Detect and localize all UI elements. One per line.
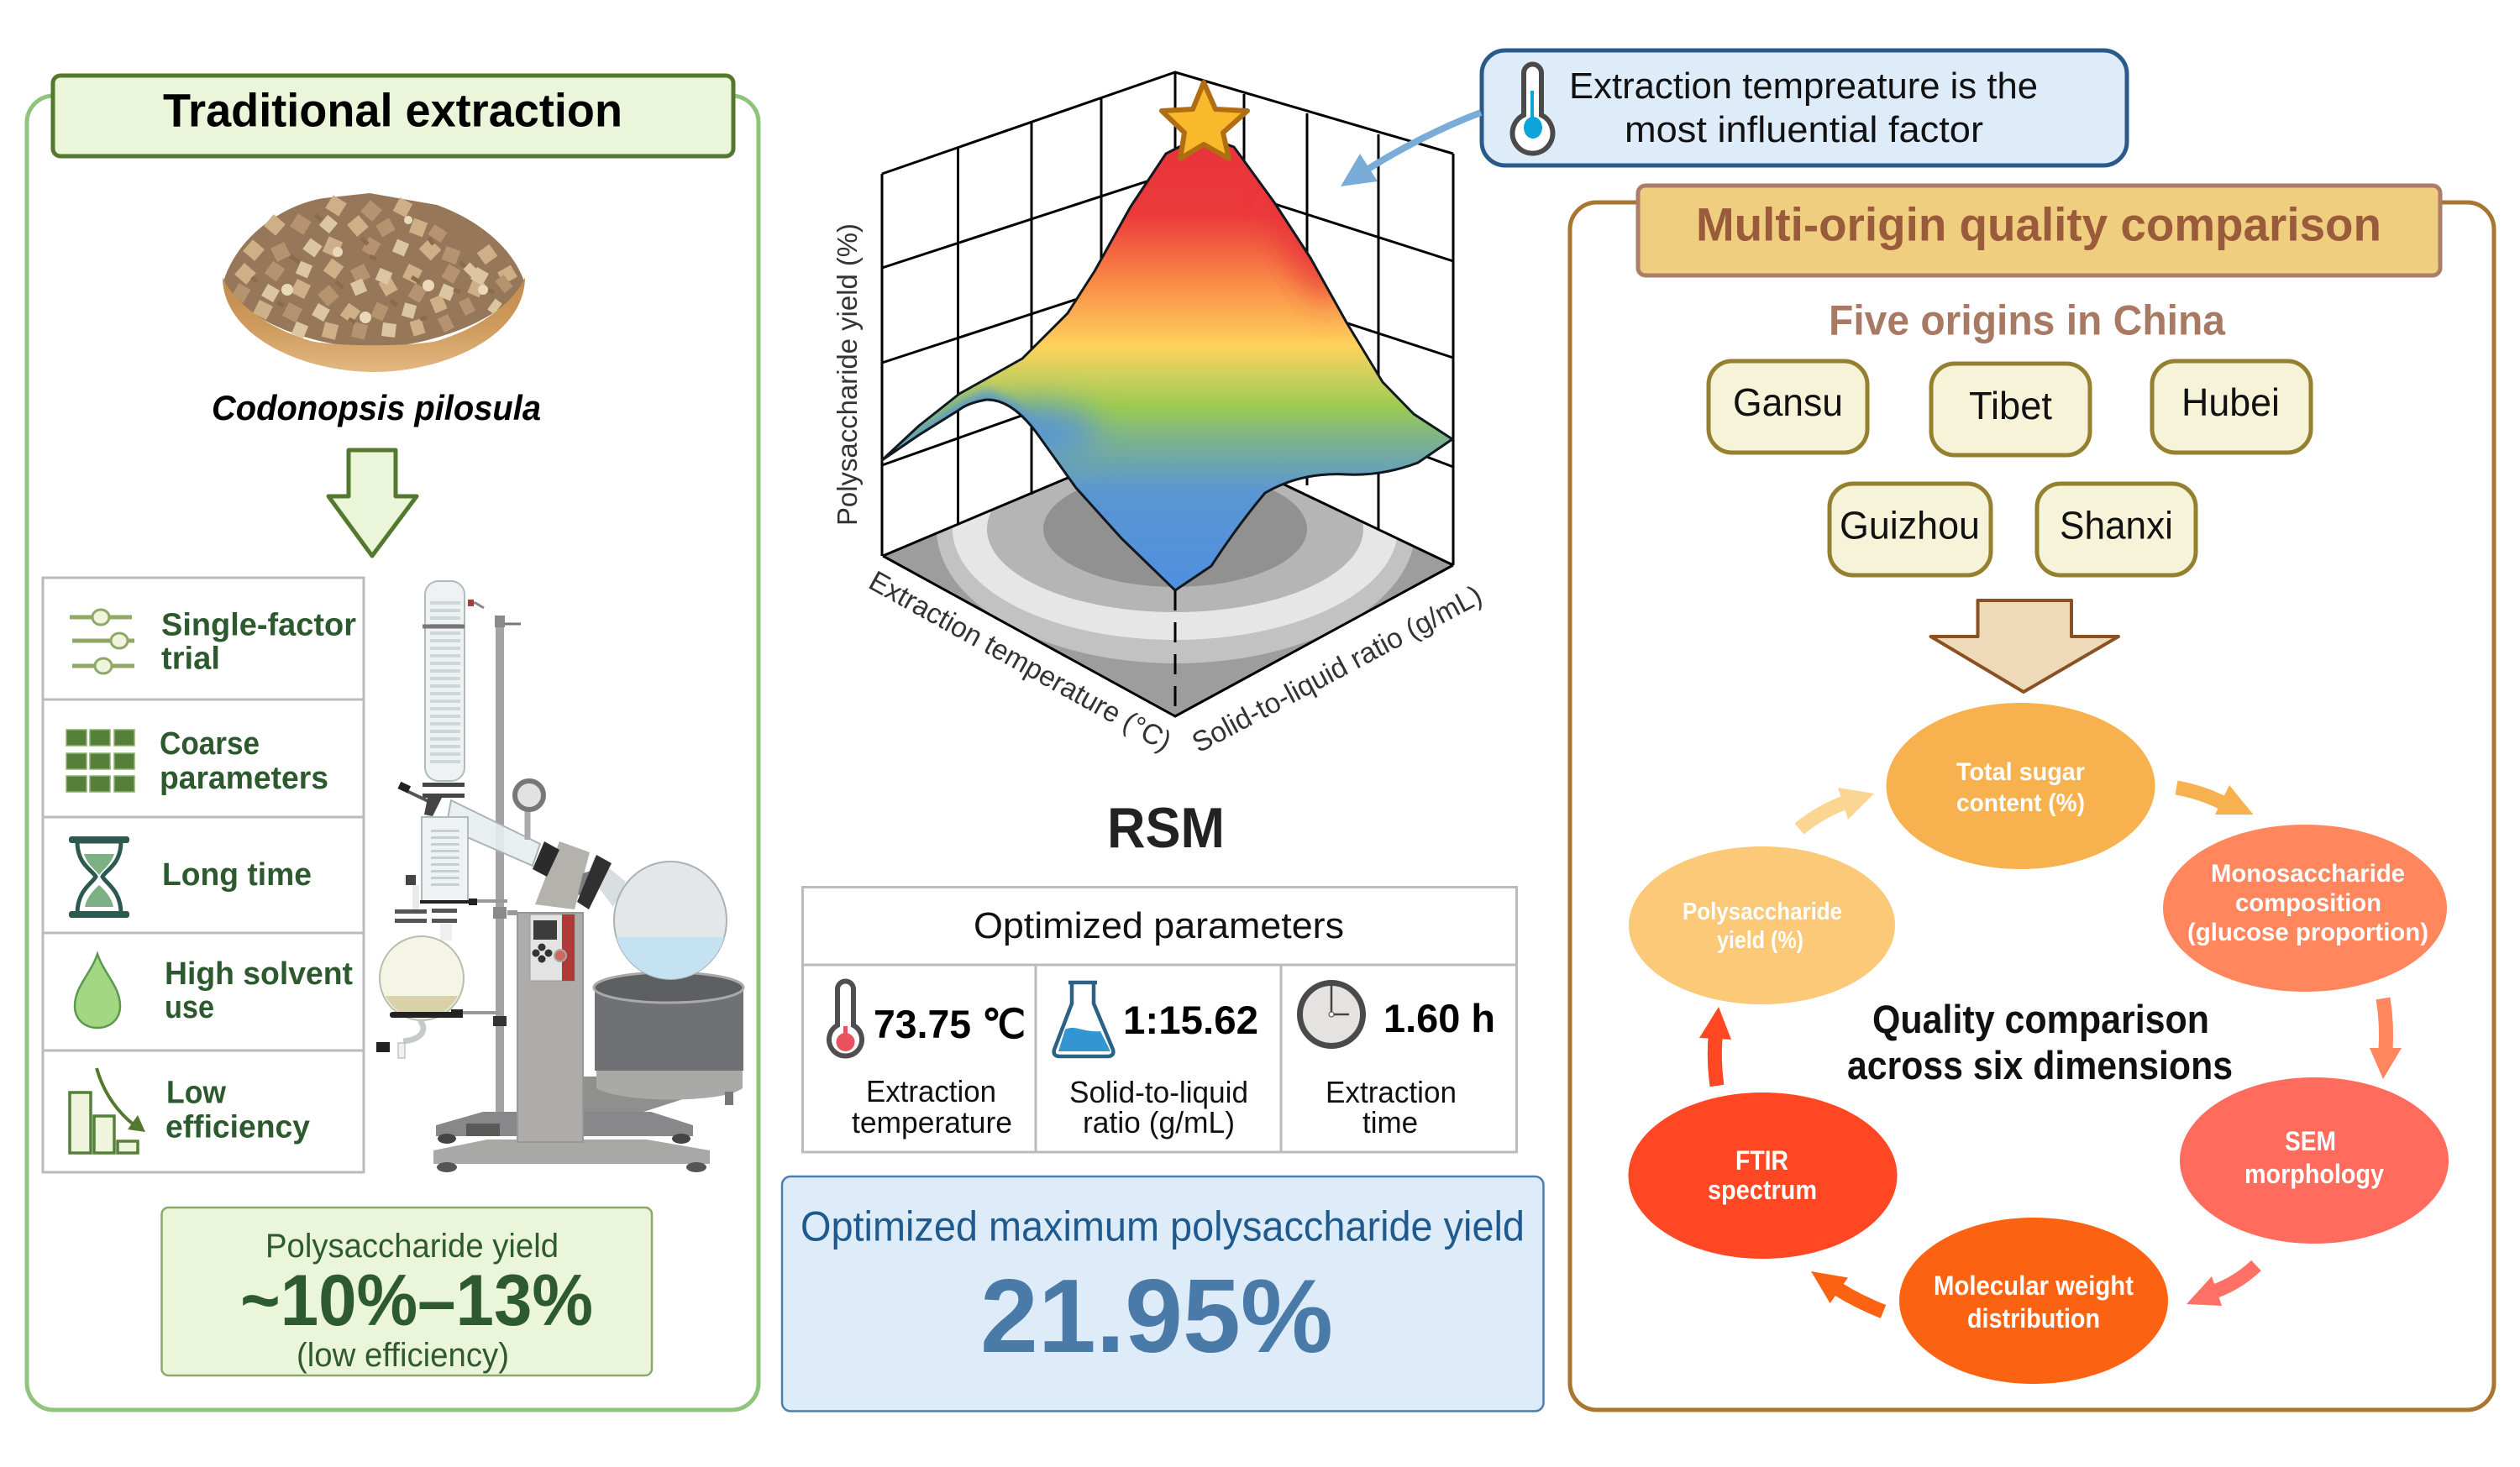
callout text [1569, 65, 2038, 150]
label: low efficiency: efficiency [165, 1110, 310, 1145]
node: total sugar content [1887, 703, 2155, 869]
axis label: ratio: Solid-to-liquid ratio (g/mL) [1187, 579, 1488, 759]
callout text: most influential factor [1625, 109, 1983, 150]
panel: traditional extraction [27, 76, 759, 1410]
icon: hourglass [69, 836, 129, 918]
callout: optimized maximum yield: Optimized maximum polysaccharide yield [801, 1202, 1525, 1250]
icon: star at optimum [1162, 82, 1247, 159]
axis label: yield: Polysaccharide yield (%) [832, 223, 863, 526]
icon: solvent drop [75, 954, 120, 1028]
lower condenser [422, 817, 468, 902]
label: high solvent use: use [165, 990, 214, 1025]
node: monosaccharide composition: composition [2235, 889, 2381, 917]
callout: traditional yield: Polysaccharide yield [265, 1228, 559, 1265]
origin: Hubei [2152, 361, 2311, 453]
time label: time [1362, 1105, 1418, 1140]
node: FTIR spectrum [1628, 1092, 1897, 1259]
icon: blue thermometer [1512, 64, 1553, 154]
panel: traditional drawbacks list [43, 578, 364, 1172]
origin: Guizhou: Guizhou [1840, 504, 1980, 548]
callout: traditional yield: (low efficiency) [297, 1337, 509, 1374]
temperature label: temperature [852, 1105, 1012, 1140]
node: SEM morphology: morphology [2244, 1159, 2384, 1189]
condenser [425, 581, 465, 781]
node: molecular weight distribution [1899, 1218, 2168, 1384]
node: total sugar content: Total sugar [1956, 758, 2085, 786]
arrow: SEM to molecular weight [2187, 1265, 2256, 1306]
origin: Hubei: Hubei [2181, 380, 2280, 424]
node: FTIR spectrum: FTIR [1735, 1145, 1788, 1176]
receiver flask [406, 875, 416, 885]
label: high solvent use [165, 956, 353, 1025]
arrow: molecular weight to FTIR [1811, 1271, 1883, 1312]
callout text: Extraction tempreature is the [1569, 65, 2038, 107]
temperature label: Extraction [866, 1074, 996, 1108]
label: single-factor trial: trial [161, 642, 220, 677]
node: SEM morphology: SEM [2285, 1126, 2336, 1156]
arrow: monosaccharide to SEM [2370, 998, 2402, 1079]
arrow: callout to surface [1341, 113, 1481, 186]
arrow: down green [328, 450, 417, 556]
center label: six dimensions: across six dimensions [1847, 1043, 2233, 1087]
node: FTIR spectrum: spectrum [1708, 1175, 1817, 1205]
node: monosaccharide composition [2163, 825, 2447, 992]
species name: Codonopsis pilosula [212, 388, 541, 427]
callout: optimized maximum yield [782, 1176, 1544, 1411]
flask [588, 857, 626, 907]
node: monosaccharide composition: Monosaccharide [2211, 860, 2405, 888]
arrow: FTIR to polysaccharide [1699, 1007, 1731, 1086]
gauge [524, 806, 531, 840]
heading: traditional extraction: Traditional extraction [163, 84, 622, 136]
label: long time: Long time [162, 857, 312, 893]
label: coarse parameters [160, 726, 328, 796]
heading: multi-origin: Multi-origin quality comparison [1696, 198, 2381, 250]
chart walls grid [882, 72, 1453, 565]
arrow: total sugar to monosaccharide [2176, 785, 2253, 815]
table heading: Optimized parameters [974, 905, 1344, 946]
ratio label: Solid-to-liquid [1069, 1075, 1248, 1109]
origin: Guizhou [1830, 484, 1991, 575]
ratio value: 1:15.62 [1123, 998, 1258, 1042]
image: bowl of Codonopsis pilosula [223, 193, 525, 372]
ratio label [1069, 1075, 1248, 1140]
glass rotary tube [446, 800, 540, 866]
label: low efficiency [165, 1075, 310, 1145]
label: high solvent use: High solvent [165, 956, 353, 992]
illustration: rotary evaporator [376, 581, 743, 1172]
label: coarse parameters: parameters [160, 761, 328, 796]
temperature value: 73.75 ℃ [874, 1002, 1026, 1046]
chart: RSM 3D response surface [832, 72, 1488, 759]
axis label: temperature: Extraction temperature (°C) [864, 565, 1177, 757]
chart floor with contours [882, 479, 1454, 718]
icon: red thermometer [829, 981, 862, 1056]
origin: Tibet: Tibet [1969, 384, 2052, 427]
label: coarse parameters: Coarse [160, 726, 260, 762]
node: molecular weight distribution: distribution [1967, 1303, 2100, 1333]
arrow: polysaccharide to total sugar [1799, 788, 1874, 829]
node: SEM morphology [2180, 1077, 2449, 1244]
icon: declining bars [70, 1068, 145, 1153]
icon: coarse grid [66, 730, 134, 792]
node: polysaccharide yield [1629, 846, 1895, 1004]
node: molecular weight distribution: Molecular weight [1934, 1271, 2134, 1301]
origin: Gansu [1709, 361, 1867, 453]
origin: Shanxi [2037, 484, 2196, 575]
callout: temperature influence [1482, 50, 2127, 165]
ratio label: ratio (g/mL) [1083, 1105, 1235, 1140]
arrow: down tan [1930, 600, 2118, 692]
node: monosaccharide composition: (glucose proportion) [2187, 919, 2428, 946]
origin: Gansu: Gansu [1733, 380, 1843, 424]
node: polysaccharide yield: Polysaccharide [1683, 899, 1842, 925]
center label: six dimensions: Quality comparison [1872, 997, 2209, 1041]
label: single-factor trial [161, 608, 356, 677]
table: optimized parameters [802, 887, 1517, 1152]
label: low efficiency: Low [166, 1075, 226, 1110]
node: polysaccharide yield: yield (%) [1717, 927, 1803, 954]
panel: multi-origin quality comparison [1570, 186, 2494, 1410]
time value: 1.60 h [1383, 996, 1495, 1040]
origin: Tibet [1931, 364, 2090, 455]
heading: RSM: RSM [1107, 796, 1225, 860]
subheading: five origins: Five origins in China [1829, 297, 2226, 344]
time label: Extraction [1326, 1075, 1457, 1109]
bath [595, 988, 743, 1071]
callout: traditional yield [161, 1208, 652, 1375]
callout: optimized maximum yield: 21.95% [980, 1259, 1333, 1375]
icon: flask [1054, 982, 1113, 1056]
node: total sugar content: content (%) [1956, 789, 2085, 817]
time label [1326, 1075, 1457, 1140]
surface [874, 126, 1462, 596]
callout: traditional yield: ~10%–13% [240, 1260, 593, 1341]
origin: Shanxi: Shanxi [2060, 504, 2173, 548]
center label: six dimensions [1847, 997, 2233, 1087]
label: single-factor trial: Single-factor [161, 608, 356, 643]
temperature label [852, 1074, 1012, 1140]
heading: traditional extraction [53, 76, 733, 156]
icon: clock [1300, 982, 1362, 1046]
icon: sliders [70, 610, 134, 673]
heading: multi-origin [1638, 186, 2440, 275]
